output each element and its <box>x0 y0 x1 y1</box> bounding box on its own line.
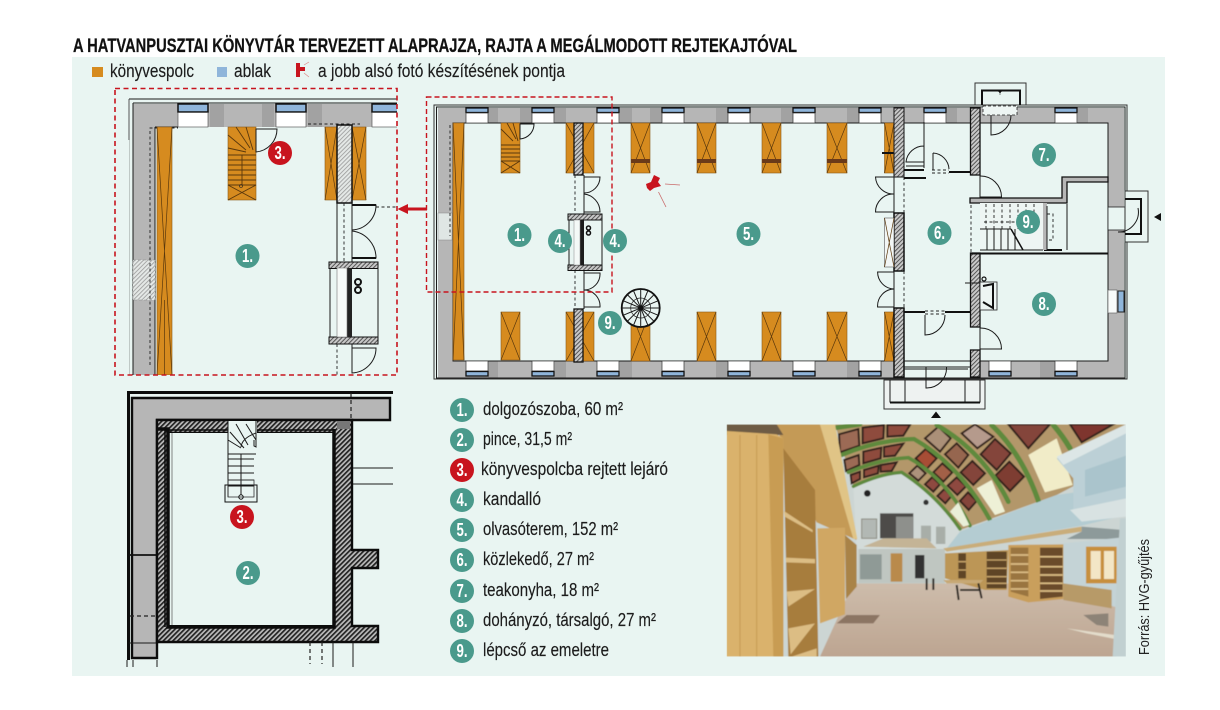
photo end wall details <box>880 513 913 538</box>
detail lower door <box>352 344 376 373</box>
basement staircase <box>225 421 257 502</box>
key 2: 2. <box>456 430 468 450</box>
second partition wall <box>904 108 980 377</box>
arrow marker south <box>931 412 941 418</box>
photo right gallery <box>948 492 1109 548</box>
key 8 <box>450 609 656 633</box>
legend: a jobb alsó fotó készítésének pontja <box>318 60 566 81</box>
marker 2 basement: 2. <box>242 563 254 583</box>
legend <box>92 60 566 81</box>
key list <box>450 398 668 663</box>
photo vault <box>835 424 1126 530</box>
marker 1: 1. <box>242 246 253 266</box>
photo ceiling wood beam <box>777 424 857 540</box>
detail double doors <box>337 203 396 262</box>
marker 1 <box>236 244 260 268</box>
photo skylights <box>1028 438 1073 492</box>
key 3 <box>450 458 668 482</box>
key 9: 9. <box>456 641 468 661</box>
source credit: Forrás: HVG-gyűjtés <box>1137 539 1153 655</box>
bottom entrance <box>884 367 985 409</box>
key 5 <box>450 518 618 542</box>
marker 3 basement <box>230 505 254 529</box>
detail fireplace <box>329 262 378 344</box>
room markers: 9. <box>1022 212 1034 232</box>
key 9 <box>450 639 609 663</box>
key 8: 8. <box>456 611 468 631</box>
key 5: olvasóterem, 152 m² <box>483 518 618 539</box>
arrow: enlarges detail <box>398 204 427 214</box>
long bookshelf <box>453 123 464 360</box>
basement upper wall <box>132 398 390 658</box>
legend: ablak <box>234 60 272 81</box>
key 2: pince, 31,5 m² <box>483 428 572 449</box>
marker 2 basement <box>236 561 260 585</box>
key 3: 3. <box>456 460 468 480</box>
top entrance <box>975 83 1026 135</box>
room markers: 4. <box>554 231 566 251</box>
photo work table <box>943 580 983 583</box>
key 4 <box>450 488 541 512</box>
page title: A HATVANPUSZTAI KÖNYVTÁR TERVEZETT ALAPRAJZA, RAJTA A MEGÁLMODOTT REJTEKAJTÓVAL <box>73 33 797 57</box>
detail windows <box>178 104 402 127</box>
camera position marker <box>646 175 680 207</box>
photo: library interior <box>727 424 1126 657</box>
basement floor plan <box>127 392 393 667</box>
doors reading room <box>876 177 894 307</box>
arrow marker east <box>1154 213 1161 221</box>
key 7: teakonyha, 18 m² <box>483 579 599 600</box>
key 5: 5. <box>456 520 468 540</box>
marker 3 basement: 3. <box>236 507 248 527</box>
detail walls <box>129 99 400 375</box>
kitchen fireplace <box>965 277 997 310</box>
basement cellar walls <box>157 420 378 642</box>
key 1: 1. <box>456 400 468 420</box>
detail long bookshelf <box>157 127 172 375</box>
photo floor <box>820 583 1117 657</box>
key 7 <box>450 579 599 603</box>
staircase to upper floor <box>971 203 1043 252</box>
key 4: kandalló <box>483 488 541 509</box>
bottom bookshelves <box>501 312 894 361</box>
key 3: könyvespolcba rejtett lejáró <box>481 458 668 479</box>
top windows <box>466 108 1077 123</box>
doors at fireplace <box>584 177 600 307</box>
partition wall reading room <box>884 108 904 377</box>
top bookshelves <box>566 123 904 173</box>
key 2 <box>450 428 572 452</box>
photo ribs <box>837 424 1070 529</box>
room markers: 9. <box>604 313 616 333</box>
room markers: 8. <box>1038 294 1050 314</box>
key 6 <box>450 548 594 572</box>
main floor plan <box>426 83 1161 418</box>
corridor doors lower <box>904 311 971 335</box>
detail dashed frame <box>115 88 397 375</box>
outer walls <box>434 105 1127 379</box>
basement outer line <box>128 392 393 660</box>
room markers: 6. <box>934 223 945 243</box>
key 9: lépcső az emeletre <box>483 639 609 660</box>
room markers: 1. <box>514 225 525 245</box>
photo freestanding shelves <box>1008 544 1063 602</box>
room markers: 5. <box>743 224 754 244</box>
right wall opening and east window <box>1108 207 1125 313</box>
key 1: dolgozószoba, 60 m² <box>483 398 623 419</box>
corridor doors upper <box>904 122 970 178</box>
partition walls service rooms <box>970 177 1108 254</box>
detail chimney wall with shelves <box>325 125 366 203</box>
key 6: közlekedő, 27 m² <box>483 548 594 569</box>
staircase in bookshelf <box>501 123 520 173</box>
key 6: 6. <box>456 550 468 570</box>
key 8: dohányzó, társalgó, 27 m² <box>483 609 656 630</box>
room doors <box>980 176 1002 349</box>
key 4: 4. <box>456 490 468 510</box>
photo ceiling panels <box>839 424 1113 510</box>
detail hidden staircase in bookshelf <box>228 127 256 200</box>
detail floor plan: enlarged corner <box>115 88 402 375</box>
door at staircase <box>520 124 534 139</box>
marker 3 red: 3. <box>274 143 286 163</box>
legend: könyvespolc <box>110 60 194 81</box>
room markers <box>508 143 1056 335</box>
chimney wall with fireplace <box>568 123 602 362</box>
marker 3 red <box>268 141 292 165</box>
photo left shelves <box>817 528 845 623</box>
key 7: 7. <box>456 581 468 601</box>
detail door at staircase <box>256 129 277 152</box>
dashed frame main plan <box>426 97 612 292</box>
spiral staircase <box>622 289 660 327</box>
bottom windows <box>466 361 1077 376</box>
room markers: 7. <box>1038 145 1050 165</box>
basement detail lines <box>127 393 393 667</box>
panel: background <box>72 57 1165 676</box>
key 1 <box>450 398 623 422</box>
east entrance <box>1118 191 1148 242</box>
room markers: 4. <box>610 231 620 251</box>
